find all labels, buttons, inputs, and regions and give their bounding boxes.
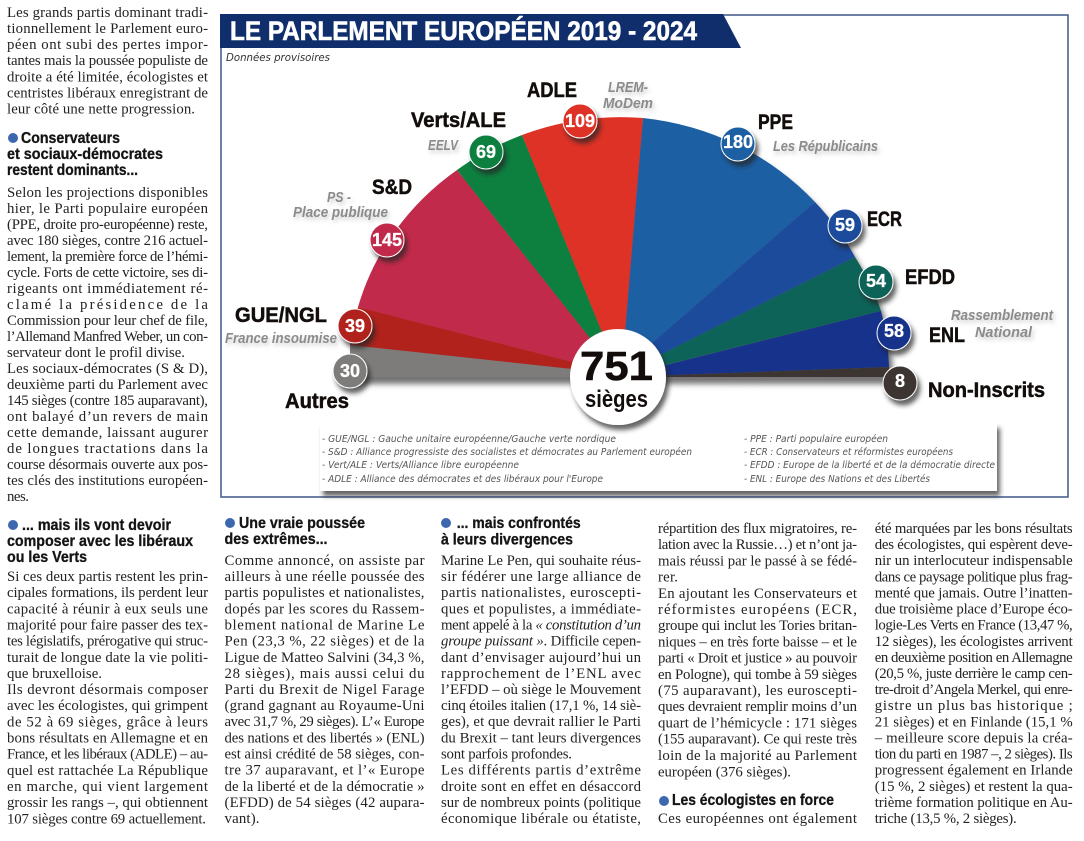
heading: Une vraie poussée des extrêmes [224,515,365,548]
text block: conservateurs body: de longues tractations dans la [7,441,208,457]
text block: conservateurs body: avec 180 sièges, contre 216 actuel- [7,233,208,249]
wedge: S&D [358,170,605,369]
badge: Verts/ALE 69 [469,135,503,169]
text block: conservateurs body: Selon les projections disponibles [7,185,208,201]
text block: extrêmes body: partis populistes et nationalistes, [224,585,424,601]
text block: introduction: centristes libéraux enregistrant de [7,86,208,102]
text block: composer body: 107 sièges contre 69 actuellement. [7,811,206,827]
wedge: ADLE [522,117,643,357]
text block: conservateurs body: rigeants ont immédiatement ré- [7,281,208,297]
text block: continuation and ECR: répartition des flux migratoires, re- [658,521,857,537]
wedge: PPE [623,118,815,362]
panel: column 5: 21 sièges) et en Finlande (15,1 % [875,714,1073,730]
panel frame [221,15,1068,497]
text block: introduction: droite a été limitée, écologistes et [7,70,209,86]
panel: column 5: due troisième place d’Europe éco- [875,602,1073,618]
wedge: Verts/ALE [457,135,612,357]
text block: divergences body: ques et populistes, a immédiate- [441,601,641,617]
text block: divergences body: sont parfois profondes. [441,746,572,762]
heading: Une vraie poussée des extrêmes: des extrêmes... [224,531,328,548]
legend box: - S&D : Alliance progressiste des socialistes et démocrates au Parlement européen [322,447,692,458]
text block: composer body: grossir les rangs –, qui obtiennent [7,795,209,811]
heading: mais confrontés à leurs divergences [441,515,581,548]
seat badges [333,104,917,400]
badge: Autres 30: 30 [340,361,360,381]
text block: extrêmes body: des nations et des libertés » (ENL) [224,730,425,746]
panel: column 5: tre-droit d’Angela Merkel, qui enre- [875,682,1073,698]
text block: continuation and ECR: en Pologne), qui tombe à 59 sièges [658,667,857,683]
text block: conservateurs body: servateur dont le profil divise. [7,345,185,361]
text block: composer body: cipales formations, ils perdent leur [7,585,208,601]
party names: GUE/NGL [235,304,327,327]
text block: composer body: turait de longue date la vie politi- [7,650,208,666]
text block: divergences body: économique libérale ou étatiste, [441,811,641,827]
badge: EFDD 54: 54 [866,271,886,291]
hemicycle chart [350,117,889,377]
text block: extrêmes body: dopés par les scores du Rassem- [224,601,425,617]
text block: extrêmes body: (EFDD) de 54 sièges (42 aupara- [224,795,425,811]
panel: column 3, mais confrontés à leurs divergences [441,515,642,827]
badge: PPE 180: 180 [723,132,753,152]
French party labels: France insoumise [225,331,337,347]
text block: continuation and ECR: quart de l’hémicycle : 171 sièges [658,715,857,731]
heading: Conservateurs et sociaux-démocrates: restent dominants... [7,162,138,179]
text block: extrêmes body: Comme annoncé, on assiste par [224,553,425,569]
text block: composer body [7,569,209,827]
text block: conservateurs body: ont balayé d’un revers de main [7,409,209,425]
text block: composer body: majorité pour faire passer des tex- [7,618,208,634]
text block: extrêmes body: tre 37 auparavant, et l’« Europe [224,763,425,779]
French party labels: Place publique [293,205,388,221]
panel: column 5: en deuxième position en Allemagne [875,650,1073,666]
panel: column 5: menté que jamais. Outre l’inatten- [875,585,1073,601]
text block: extrêmes body: vant). [224,811,260,827]
text block: composer body: bons résultats en Allemagne et en [7,730,209,746]
badge: GUE/NGL 39: 39 [345,316,365,336]
text block: extrêmes body: est ainsi crédité de 58 sièges, con- [224,746,425,762]
badge: Non-Inscrits 8 [883,366,917,400]
party names: ADLE [527,79,577,102]
text block: divergences body: Les différents partis d’extrême [441,763,641,779]
panel: column 5: (15 %, 2 sièges) et restent la qua- [875,779,1073,795]
center total: 751 sièges: 751 [580,343,653,389]
panel: column 5: été marquées par les bons résultats [875,521,1073,537]
text block: divergences body: cinq étoiles italien (17,1 %, 14 siè- [441,698,641,714]
French party labels: PS - [327,190,351,206]
legend box: - PPE : Parti populaire européen [744,434,888,445]
party names: ECR [867,208,902,231]
panel: column 2, Une vraie poussée des extrêmes [224,515,425,827]
text block: divergences body: l’EFDD – où siège le Mouvement [441,682,642,698]
subtitle: données provisoires: Données provisoires [226,52,331,64]
legend box: - Vert/ALE : Verts/Alliance libre européenne [322,460,519,471]
heading: Les écologistes en force: Les écologistes en force [672,792,834,809]
badge: ECR 59 [828,209,862,243]
text block: continuation and ECR: européen (376 sièges). [658,765,791,781]
text block: conservateurs body: course désormais ouverte aux pos- [7,457,208,473]
center total: 751 sièges [570,329,666,425]
text block: divergences body: groupe puissant ». Difficile cepen- [441,634,641,650]
text block: extrêmes body: 28 sièges), mais aussi celui du [224,666,425,682]
text block: continuation and ECR: mais réussi par le passé à se fédé- [658,553,857,569]
text block: conservateurs body: (PPE, droite pro-européenne) reste, [7,217,208,233]
panel: hemicycle infographic [220,14,1068,497]
text block: introduction: tantes mais la poussée populiste de [7,53,208,69]
text block: conservateurs body: l’Allemand Manfred Weber, un con- [7,329,208,345]
text block: composer body: de 52 à 69 sièges, grâce à leurs [7,714,208,730]
panel: column 5: dans ce paysage politique plus frag- [875,569,1073,585]
legend box: - ENL : Europe des Nations et des Libertés [744,474,930,485]
wedge: ECR [630,202,855,370]
French party labels: Rassemblement [951,308,1054,324]
text block: continuation and ECR: rer. [658,570,678,586]
badge: Non-Inscrits 8: 8 [895,371,905,391]
heading: mais ils vont devoir composer [7,517,193,566]
panel: column 5: progressent également en Irlande [875,763,1073,779]
panel: column 5: logie-Les Verts en France (13,47 %, [875,618,1073,634]
heading: mais ils vont devoir composer: ou les Verts [7,549,87,566]
text block: composer body: que bruxelloise. [7,666,102,682]
heading: Une vraie poussée des extrêmes: Une vraie poussée [239,515,365,532]
legend box: - GUE/NGL : Gauche unitaire européenne/Gauche verte nordique [322,434,616,445]
text block: conservateurs body: tes clés des institutions européen- [7,473,208,489]
badge: EFDD 54 [859,265,893,299]
badge: Verts/ALE 69: 69 [476,142,496,162]
text block: continuation and ECR: lation avec la Russie…) et n’ont ja- [658,537,857,553]
French party labels: EELV [428,138,459,154]
party names [235,79,1045,413]
wedge: GUE/NGL [350,307,600,372]
text block: introduction: leur côté une nette progression. [7,102,195,118]
badge: ADLE 109 [563,104,597,138]
panel: left article column [7,5,209,827]
badge: ECR 59: 59 [835,215,855,235]
heading: mais confrontés à leurs divergences: ... mais confrontés [457,515,581,532]
text block: composer body: tes législatifs, prérogative qui struc- [7,634,208,650]
wedge: Non-Inscrits [620,367,889,377]
heading: Conservateurs et sociaux-démocrates: Conservateurs [21,130,120,147]
text block: divergences body: du Brexit – tant leurs divergences [441,730,641,746]
legend box: - EFDD : Europe de la liberté et de la démocratie directe [744,460,995,471]
legend box: - ADLE : Alliance des démocrates et des libéraux pour l'Europe [322,474,603,485]
text block: continuation and ECR: réformistes européens (ECR, [658,602,857,618]
text block: composer body: Si ces deux partis restent les prin- [7,569,208,585]
text block: écologistes first line: Ces européennes ont également [658,811,858,827]
text block: extrêmes body: Pen (23,3 %, 22 sièges) et de la [224,634,425,650]
text block: extrêmes body [224,553,425,827]
panel: column 5: triche (13,5 %, 2 sièges). [875,811,1017,827]
French party labels: MoDem [603,96,653,112]
text block: continuation and ECR: En ajoutant les Conservateurs et [658,586,858,602]
badge: PPE 180 [721,127,755,161]
party names: Autres [285,390,349,413]
badge: ENL 58: 58 [884,321,904,341]
heading: Conservateurs et sociaux-démocrates [7,130,163,179]
legend box: - ECR : Conservateurs et réformistes européens [744,447,953,458]
text block: conservateurs body: Les sociaux-démocrates (S & D), [7,361,208,377]
text block: continuation and ECR: (75 auparavant), les euroscepti- [658,683,857,699]
wedge: ENL [620,311,889,377]
text block: divergences body: sir fédérer une large alliance de [441,569,641,585]
party names: Verts/ALE [411,109,506,132]
text block: continuation and ECR: loin de la majorité au Parlement [658,748,858,764]
text block: introduction [7,5,209,118]
panel: column 5: (20,5 %, juste derrière le camp cen- [875,666,1073,682]
text block: composer body: Ils devront désormais composer [7,682,208,698]
text block: composer body: France, et les libéraux (ADLE) – au- [7,747,208,763]
wedge: EFDD [630,257,881,374]
text block: conservateurs body: nes. [7,489,29,505]
badge: ENL 58 [877,316,911,350]
text block: continuation and ECR [658,521,858,781]
panel: column 5: gistre un plus bas historique ; [875,698,1073,714]
heading: mais ils vont devoir composer: ... mais ils vont devoir [22,517,171,534]
text block: divergences body: dant d’envisager aujourd’hui un [441,650,642,666]
text block: extrêmes body: de la liberté et de la démocratie » [224,779,424,795]
text block: conservateurs body: hier, le Parti populaire européen [7,201,209,217]
text block: conservateurs body [7,185,209,505]
text block: conservateurs body: lement, la première force de l’hémi- [7,249,208,265]
text block: conservateurs body: clamé la présidence de la [7,297,208,313]
panel: column 5: nir un interlocuteur indispensable [875,553,1073,569]
text block: introduction: tionnellement le Parlement euro- [7,21,208,37]
text block: divergences body: droite sont en effet en désaccord [441,779,642,795]
French party labels: LREM- [608,80,648,96]
badge: GUE/NGL 39 [338,309,372,343]
wedge: Autres [350,345,610,377]
French party labels [225,80,1054,347]
party names: PPE [758,111,793,134]
text block: extrêmes body: Ligue de Matteo Salvini (34,3 %, [224,650,424,666]
text block: composer body: quel est rattachée La République [7,763,208,779]
text block: introduction: Les grands partis dominant tradi- [7,5,208,21]
text block: extrêmes body: avec 31,7 %, 29 sièges). L’« Europe [224,714,425,730]
text block: composer body: capacité à réunir à eux seuls une [7,601,208,617]
panel: column 5: trième formation politique en Au- [875,795,1073,811]
panel: column 4 [658,521,858,827]
party names: EFDD [905,266,955,289]
text block: divergences body: partis nationalistes, euroscepti- [441,585,641,601]
text block: conservateurs body: 145 sièges (contre 185 auparavant), [7,393,208,409]
text block: divergences body [441,553,642,827]
legend box [320,423,997,491]
panel: column 5 [874,521,1074,827]
party names: ENL [929,324,965,347]
text block: continuation and ECR: (155 auparavant). Ce qui reste très [658,732,857,748]
text block: extrêmes body: blement national de Marine Le [224,618,425,634]
text block: divergences body: ment appelé à la « constitution d’un [441,618,641,634]
heading: Conservateurs et sociaux-démocrates: et sociaux-démocrates [7,146,163,163]
text block: divergences body: Marine Le Pen, qui souhaite réus- [441,553,641,569]
text block: continuation and ECR: niques – en très forte baisse – et le [658,634,857,650]
heading: mais confrontés à leurs divergences: à leurs divergences [441,532,573,548]
text block: conservateurs body: cette demande, laissant augurer [7,425,208,441]
text block: conservateurs body: Commission pour leur chef de file, [7,313,208,329]
badge: S&D 145 [370,223,404,257]
text block: divergences body: ges), et que devrait rallier le Parti [441,714,641,730]
panel: column 5: – meilleure score depuis la créa- [874,730,1073,746]
French party labels: Les Républicains [773,139,878,155]
title banner: LE PARLEMENT EUROPÉEN 2019 - 2024 [230,15,697,46]
text block: divergences body: rapprochement de l’ENL avec [441,666,641,682]
badge: S&D 145: 145 [372,230,402,250]
panel: column 5: tion du parti en 1987 –, 2 sièges). Ils [875,747,1073,763]
text block: conservateurs body: deuxième parti du Parlement avec [7,377,208,393]
heading: mais ils vont devoir composer: composer avec les libéraux [7,533,193,550]
panel: column 5: 12 sièges), les écologistes arrivent [875,634,1074,650]
panel: column 5: des écologistes, qui espèrent deve- [875,537,1073,553]
text block: extrêmes body: (grand gagnant au Royaume-Uni [224,698,424,714]
text block: conservateurs body: cycle. Forts de cette victoire, ses di- [7,265,208,281]
center total: 751 sièges: sièges [585,386,648,413]
text block: divergences body: sur de nombreux points (politique [441,795,641,811]
party names: S&D [372,176,412,199]
text block: extrêmes body: Parti du Brexit de Nigel Farage [224,682,425,698]
French party labels: National [975,325,1033,341]
text block: continuation and ECR: groupe qui inclut les Tories britan- [658,618,857,634]
text block: extrêmes body: ailleurs à une réelle poussée des [224,569,425,585]
text block: composer body: en marche, qui vient largement [7,779,209,795]
text block: continuation and ECR: ques devraient remplir moins d’un [658,699,858,715]
badge: Autres 30 [333,354,367,388]
badge: ADLE 109: 109 [565,111,595,131]
text block: introduction: péen ont subi des pertes impor- [7,37,208,53]
party names: Non-Inscrits [928,379,1045,402]
text block: composer body: avec les écologistes, qui grimpent [7,698,209,714]
text block: continuation and ECR: parti « Droit et justice » au pouvoir [658,651,857,667]
